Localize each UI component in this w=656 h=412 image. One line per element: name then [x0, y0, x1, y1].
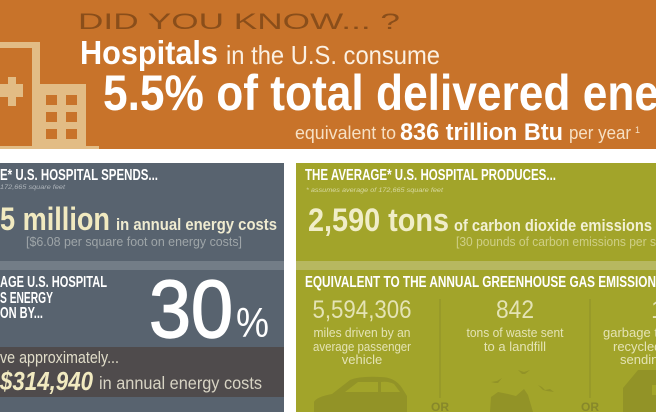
text: reduce consumption: S ENERGY: [0, 290, 53, 307]
text: cost per square foot: [$6.08 per square foot on energy costs]: [26, 234, 242, 249]
column: miles driven: vehicle: [342, 352, 382, 367]
icon: garbage truck: [623, 370, 656, 412]
text: equivalent btu: 1: [635, 125, 640, 135]
panel: orange header: [0, 0, 656, 149]
statistic: annual energy cost: in annual energy costs: [116, 215, 277, 234]
band: savings: in annual energy costs: [99, 373, 262, 393]
column: miles driven: miles driven by an: [314, 325, 410, 340]
heading: hospital produces: THE AVERAGE* U.S. HOSPITAL PRODUCES...: [305, 167, 556, 184]
column: garbage trucks: [603, 296, 656, 367]
text: equivalent btu: equivalent to: [295, 123, 396, 143]
label: or: [431, 400, 599, 412]
statistic: annual energy cost: [0, 201, 277, 237]
text: reduce consumption: AGE U.S. HOSPITAL: [0, 274, 107, 291]
column: miles driven: 5,594,306: [312, 296, 412, 324]
text: reduce consumption: [0, 274, 107, 322]
statistic: annual energy cost: 5 million: [0, 201, 110, 237]
text: equivalent btu: [295, 119, 640, 146]
column: waste to landfill: tons of waste sent: [466, 325, 564, 340]
footnote: square feet: 172,665 square feet: [0, 184, 66, 191]
column: waste to landfill: to a landfill: [484, 339, 546, 354]
statistic: 30 percent: 30: [149, 264, 233, 355]
band: savings: ve approximately...: [0, 349, 119, 367]
statistic: carbon dioxide tons: [308, 202, 652, 238]
statistic: carbon dioxide tons: 2,590 tons: [308, 202, 449, 238]
footnote: assumes average: * assumes average of 172,665 square feet: [306, 187, 444, 194]
heading: hospital spends: E* U.S. HOSPITAL SPENDS...: [0, 167, 158, 184]
text: equivalent btu: 836 trillion Btu: [400, 119, 563, 146]
text: equivalent btu: per year: [569, 123, 631, 143]
panel: carbon emissions: [296, 163, 656, 412]
icon: landfill with birds: [490, 370, 554, 412]
heading: hospitals in the U.S. consume: [80, 34, 440, 71]
band: savings: $314,940: [0, 366, 93, 396]
statistic: 30 percent: %: [236, 299, 269, 346]
icon: hospital: [0, 42, 99, 149]
column: waste to landfill: 842: [496, 296, 534, 324]
column: miles driven: [312, 296, 412, 367]
heading: hospitals in the U.S. consume: Hospitals: [80, 34, 218, 71]
column: miles driven: average passenger: [313, 339, 412, 354]
heading: hospitals in the U.S. consume: in the U.S. consume: [226, 40, 440, 70]
heading: did you know: DID YOU KNOW... ?: [78, 9, 400, 34]
text: reduce consumption: ON BY...: [0, 305, 43, 322]
panel: energy costs: [0, 163, 284, 412]
icon: car: [314, 377, 407, 412]
column: waste to landfill: [466, 296, 564, 354]
band: savings: [0, 347, 284, 397]
